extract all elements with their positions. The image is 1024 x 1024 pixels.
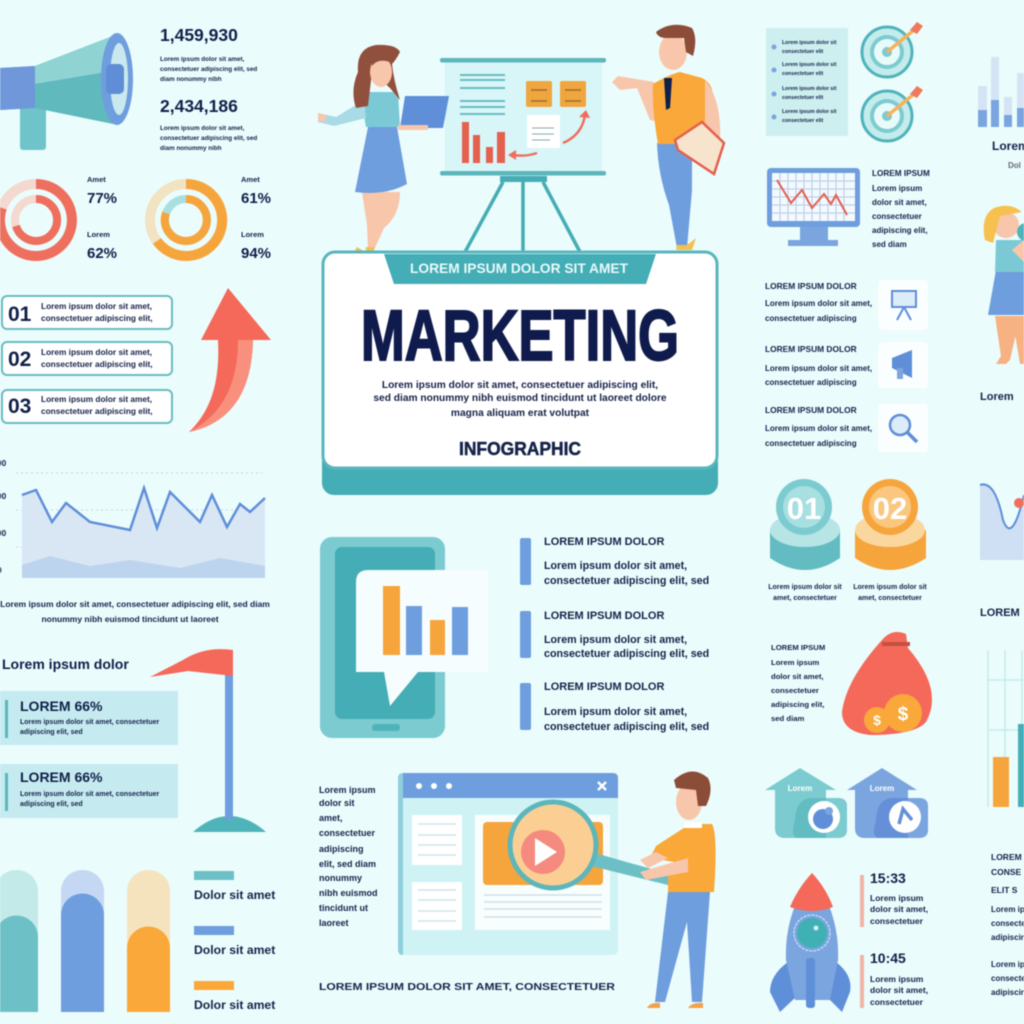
left text column: amet, — [319, 813, 343, 823]
time block 10:45: dolor sit amet, — [870, 985, 928, 995]
left text column — [319, 785, 378, 928]
phone text block 1: consectetuer adipiscing elit, sed — [544, 575, 709, 587]
legend: Dolor sit amet — [194, 998, 275, 1012]
title ribbon — [384, 254, 656, 284]
legend: Dolor sit amet — [194, 888, 275, 902]
right edge line chart — [980, 484, 1024, 560]
area line chart — [0, 458, 265, 578]
monitor text: LOREM IPSUM — [872, 169, 930, 178]
donut labels: orange: 94% — [241, 245, 271, 262]
phone text block 3: Lorem ipsum dolor sit amet, — [544, 706, 687, 718]
stat: 2,434,186: diam nonummy nibh — [160, 145, 222, 152]
card: lorem 66% one — [0, 691, 178, 745]
badge 02 — [855, 479, 926, 570]
text block with megaphone icon: Lorem ipsum dolor sit amet, — [765, 364, 872, 373]
donut labels: red: 77% — [87, 190, 117, 207]
time block 15:33: 15:33 — [870, 870, 906, 886]
time block 15:33: consectetuer — [870, 916, 924, 926]
right edge bar chart top — [978, 57, 1024, 127]
text block with search icon: LOREM IPSUM DOLOR — [765, 405, 857, 415]
list item 02 — [2, 342, 172, 375]
monitor text: consectetuer — [872, 212, 922, 221]
description: sed diam nonummy nibh euismod tincidunt ut laoreet dolore — [373, 393, 667, 404]
money bag text: dolor sit amet, — [771, 672, 824, 681]
stat: 1,459,930: Lorem ipsum dolor sit amet, — [160, 56, 245, 63]
card: lorem 66% one: LOREM 66% — [20, 698, 103, 714]
icon: target top — [862, 22, 923, 77]
badge 02: 02 — [873, 491, 907, 526]
description — [373, 380, 667, 419]
icon: red up arrow — [189, 288, 271, 432]
time block 10:45: consectetuer — [870, 997, 924, 1007]
donut labels: red — [87, 175, 117, 262]
stat: 2,434,186: 2,434,186 — [160, 96, 238, 116]
left text column: consectetuer — [319, 828, 376, 838]
left text column: dolor sit — [319, 798, 355, 808]
right edge text: LOREM — [991, 852, 1022, 862]
right edge text: CONSE — [991, 867, 1022, 877]
right edge bar chart bottom — [988, 650, 1024, 807]
left text column: adipiscing — [319, 844, 364, 854]
donut chart: orange — [150, 184, 222, 256]
phone text block 3: LOREM IPSUM DOLOR — [544, 681, 664, 693]
icon: phone with chart bubble — [320, 537, 488, 738]
stat: 1,459,930: diam nonummy nibh — [160, 76, 222, 83]
card: lorem 66% two: adipiscing elit, sed — [20, 801, 83, 808]
donut labels: red: Amet — [87, 175, 106, 184]
icon: money bag: $ — [898, 704, 909, 725]
description: magna aliquam erat volutpat — [451, 408, 590, 419]
right edge text: ELIT S — [991, 885, 1018, 895]
monitor text — [872, 169, 930, 249]
left text column: nonummy — [319, 873, 362, 883]
phone text block 1 — [520, 536, 709, 587]
list item 03: consectetuer adipiscing elit, — [41, 406, 153, 416]
main title card — [322, 252, 718, 495]
stat: 1,459,930: 1,459,930 — [160, 25, 238, 45]
list item 01: Lorem ipsum dolor sit amet, — [41, 301, 152, 311]
legend: Dolor sit amet — [194, 943, 275, 957]
money bag text: LOREM IPSUM — [771, 643, 825, 652]
icon: small megaphone — [878, 342, 928, 388]
checklist panel: Lorem ipsum dolor sit — [782, 40, 837, 46]
checklist panel: Lorem ipsum dolor sit — [782, 109, 837, 115]
browser window with magnifier and man — [398, 771, 716, 1008]
icon: flag — [150, 649, 266, 832]
left text column: tincidunt ut — [319, 903, 368, 913]
list item 01 — [2, 296, 172, 329]
left text column: nibh euismod — [319, 888, 378, 898]
icon: house with camera — [765, 768, 847, 838]
left text column: Lorem ipsum — [319, 785, 376, 795]
caption: browser section: LOREM IPSUM DOLOR SIT AMET, CONSECTETUER — [319, 981, 615, 993]
phone text block 2: LOREM IPSUM DOLOR — [544, 610, 664, 622]
checklist panel: Lorem ipsum dolor sit — [782, 62, 837, 68]
phone text block 2: Lorem ipsum dolor sit amet, — [544, 634, 687, 646]
chart caption — [0, 599, 270, 624]
legend — [194, 871, 275, 1012]
right edge label: Dol — [1008, 161, 1021, 170]
donut labels: orange: Amet — [241, 175, 260, 184]
donut labels: orange: Lorem — [241, 230, 264, 239]
donut chart: red — [0, 184, 72, 256]
text block with search icon — [765, 405, 872, 448]
phone text block 3: consectetuer adipiscing elit, sed — [544, 721, 709, 733]
checklist panel: consectetuer elit — [782, 49, 823, 55]
stat: 2,434,186 — [160, 96, 257, 152]
chart caption: Lorem ipsum dolor sit amet, consectetuer adipiscing elit, sed diam — [0, 599, 270, 609]
icon: rocket — [770, 873, 850, 1012]
stat: 1,459,930: consectetuer adipiscing elit, sed — [160, 66, 257, 73]
right edge label 2: Lorem — [980, 391, 1014, 403]
time block 15:33 — [860, 870, 928, 927]
text block with chart icon — [765, 281, 872, 323]
left text column: elit, sed diam — [319, 859, 376, 869]
man with folder — [612, 25, 724, 250]
money bag text: consectetuer — [771, 686, 819, 695]
donut labels: red: Lorem — [87, 230, 110, 239]
right edge woman — [984, 206, 1024, 364]
time block 10:45 — [860, 950, 928, 1008]
subtitle: INFOGRAPHIC — [459, 439, 581, 459]
description: Lorem ipsum dolor sit amet, consectetuer adipiscing elit, — [382, 380, 658, 391]
icon: target bottom — [862, 86, 923, 141]
stat: 2,434,186: Lorem ipsum dolor sit amet, — [160, 125, 245, 132]
phone text block 1: Lorem ipsum dolor sit amet, — [544, 560, 687, 572]
text block with chart icon: LOREM IPSUM DOLOR — [765, 281, 857, 291]
icon: money bag: $ — [873, 712, 881, 728]
donut labels: orange: 61% — [241, 190, 271, 207]
time block 15:33: Lorem ipsum — [870, 893, 924, 903]
whiteboard — [440, 58, 606, 252]
text block with megaphone icon: LOREM IPSUM DOLOR — [765, 344, 857, 354]
money bag text — [771, 643, 825, 723]
text block with chart icon: Lorem ipsum dolor sit amet, — [765, 299, 872, 308]
list item 03: Lorem ipsum dolor sit amet, — [41, 394, 152, 404]
money bag text: adipiscing elit, — [771, 700, 824, 709]
title ribbon: LOREM IPSUM DOLOR SIT AMET — [410, 260, 628, 276]
list item 01: consectetuer adipiscing elit, — [41, 313, 153, 323]
money bag text: sed diam — [771, 714, 804, 723]
magnifier — [510, 802, 676, 888]
text block with search icon: Lorem ipsum dolor sit amet, — [765, 424, 872, 433]
checklist panel: consectetuer elit — [782, 118, 823, 124]
checklist panel: consectetuer elit — [782, 95, 823, 101]
browser window — [398, 773, 618, 955]
monitor text: Lorem ipsum — [872, 184, 922, 193]
monitor text: sed diam — [872, 240, 907, 249]
icon: search — [878, 404, 928, 452]
phone text block 2: consectetuer adipiscing elit, sed — [544, 648, 709, 660]
phone text block 3 — [520, 681, 709, 733]
card: lorem 66% two — [0, 764, 178, 818]
text block with search icon: consectetuer adipiscing — [765, 439, 857, 448]
text block with chart icon: consectetuer adipiscing — [765, 314, 857, 323]
time block 10:45: 10:45 — [870, 950, 906, 966]
card: lorem 66% two: LOREM 66% — [20, 769, 103, 785]
card: lorem 66% two: Lorem ipsum dolor sit amet, consectetuer — [20, 791, 160, 798]
checklist panel: consectetuer elit — [782, 71, 823, 77]
list item 01: 01 — [8, 303, 32, 326]
presentation scene — [318, 25, 724, 252]
card: lorem 66% one: Lorem ipsum dolor sit amet, consectetuer — [20, 719, 160, 726]
badge captions: Lorem ipsum dolor sit — [768, 584, 842, 591]
list item 03 — [2, 390, 172, 423]
chart caption: nonummy nibh euismod tincidunt ut laoreet — [41, 614, 219, 624]
time block 15:33: dolor sit amet, — [870, 904, 928, 914]
stat: 1,459,930 — [160, 25, 257, 83]
badge captions: amet, consectetuer — [858, 595, 922, 602]
icon: megaphone — [0, 33, 133, 150]
list item 02: consectetuer adipiscing elit, — [41, 359, 153, 369]
right edge text — [991, 852, 1024, 997]
badge 01 — [770, 479, 840, 570]
numbered list — [2, 296, 172, 423]
list item 02: 02 — [8, 348, 31, 371]
donut labels: orange — [241, 175, 271, 262]
right edge heading: LOREM — [980, 607, 1020, 619]
icon: house with music: Lorem — [870, 784, 894, 793]
badge captions — [768, 584, 927, 602]
icon: house with camera: Lorem — [788, 784, 812, 793]
text block with megaphone icon: consectetuer adipiscing — [765, 378, 857, 387]
badge captions: Lorem ipsum dolor sit — [853, 584, 927, 591]
icon: house with music — [847, 768, 928, 838]
icon: monitor with chart — [767, 168, 860, 246]
capsule bar chart — [0, 870, 170, 1012]
text block with megaphone icon — [765, 344, 872, 387]
heading: flag section: Lorem ipsum dolor — [2, 656, 129, 672]
badge captions: amet, consectetuer — [773, 595, 837, 602]
stat: 2,434,186: consectetuer adipiscing elit, sed — [160, 135, 257, 142]
monitor text: adipiscing elit, — [872, 226, 928, 235]
phone text block 1: LOREM IPSUM DOLOR — [544, 536, 664, 548]
donut labels: red: 62% — [87, 245, 117, 262]
left text column: laoreet — [319, 918, 349, 928]
list item 03: 03 — [8, 395, 31, 418]
icon: presentation — [878, 280, 928, 330]
list item 02: Lorem ipsum dolor sit amet, — [41, 347, 152, 357]
title: MARKETING — [361, 297, 679, 376]
man figure — [640, 771, 716, 1008]
badge 01: 01 — [787, 491, 821, 526]
money bag text: Lorem ipsum — [771, 658, 819, 667]
phone text block 2 — [520, 610, 709, 660]
icon: money bag — [842, 632, 932, 735]
monitor text: dolor sit amet, — [872, 198, 927, 207]
card: lorem 66% one: adipiscing elit, sed — [20, 729, 83, 736]
right edge label — [992, 139, 1024, 170]
checklist panel — [766, 28, 848, 136]
woman with laptop — [318, 45, 449, 252]
time block 10:45: Lorem ipsum — [870, 974, 924, 984]
checklist panel: Lorem ipsum dolor sit — [782, 86, 837, 92]
